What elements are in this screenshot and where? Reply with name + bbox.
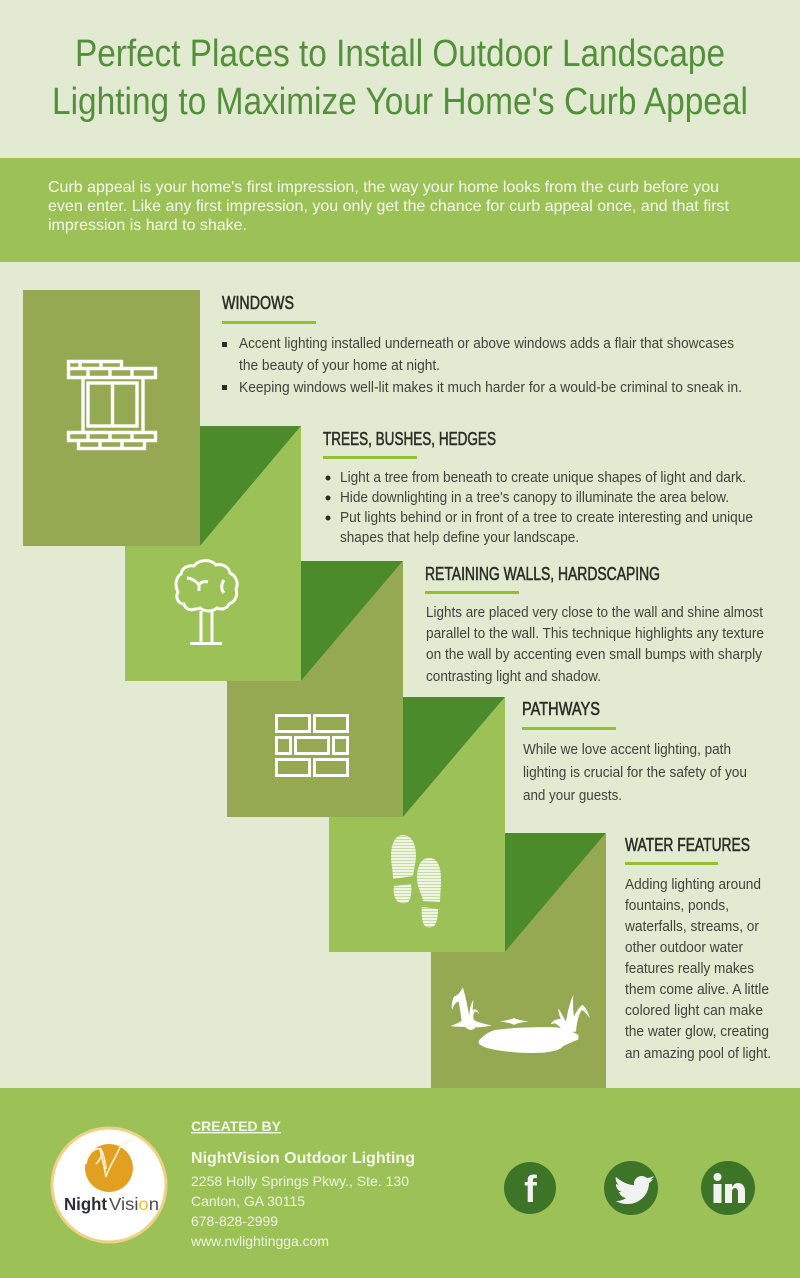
- panel: water block: [431, 833, 606, 1088]
- intro band: Curb appeal is your home's first impression, the way your home looks from the curb before you: [48, 179, 719, 196]
- contact details: Canton, GA 30115: [191, 1193, 305, 1209]
- section: water features: Adding lighting around: [625, 877, 761, 893]
- icon: pond with reeds: [451, 987, 590, 1053]
- icon: linkedin: [701, 1161, 755, 1215]
- contact details: www.nvlightingga.com: [190, 1233, 329, 1249]
- section: trees: Hide downlighting in a tree's canopy to illuminate the area below.: [340, 490, 729, 506]
- section: retaining walls: parallel to the wall. This technique highlights any texture: [426, 626, 764, 642]
- icon: twitter: [604, 1161, 658, 1215]
- heading: water features: WATER FEATURES: [625, 835, 750, 855]
- section: pathways: lighting is crucial for the safety of you: [523, 765, 747, 781]
- section: pathways: and your guests.: [523, 788, 622, 804]
- logo: NightVision: Vision: [109, 1194, 159, 1214]
- icon: facebook: f: [524, 1169, 537, 1211]
- section: pathways: [522, 699, 747, 804]
- heading: pathways: PATHWAYS: [522, 699, 600, 719]
- section: windows: Accent lighting installed underneath or above windows adds a flair that showcases: [239, 336, 734, 352]
- icon: tree: [176, 561, 237, 644]
- section: windows: the beauty of your home at night.: [239, 358, 440, 374]
- section: trees: Light a tree from beneath to create unique shapes of light and dark.: [340, 470, 746, 486]
- contact details: NightVision Outdoor Lighting: [191, 1150, 415, 1167]
- logo: NightVision: [52, 1128, 166, 1242]
- section: retaining walls: contrasting light and shadow.: [426, 669, 601, 685]
- section: retaining walls: Lights are placed very close to the wall and shine almost: [426, 605, 763, 621]
- section: water features: the water glow, creating: [625, 1024, 769, 1040]
- section: water features: other outdoor water: [625, 940, 743, 956]
- section: windows: [222, 293, 742, 396]
- panel: trees block: [125, 426, 301, 681]
- panel: pathways block: [329, 697, 505, 952]
- heading: windows: WINDOWS: [222, 293, 294, 313]
- contact details: 2258 Holly Springs Pkwy., Ste. 130: [191, 1173, 409, 1189]
- contact details: [190, 1118, 415, 1249]
- icon: brick wall: [276, 716, 348, 776]
- icon: facebook: [504, 1162, 556, 1214]
- logo: NightVision: Night: [64, 1194, 107, 1214]
- section: water features: waterfalls, streams, or: [624, 919, 759, 935]
- title: Perfect Places to Install Outdoor Landscape: [75, 33, 725, 75]
- section: water features: fountains, ponds,: [625, 898, 729, 914]
- section: trees: Put lights behind or in front of a tree to create interesting and unique: [340, 510, 753, 526]
- panel: windows block: [23, 290, 200, 546]
- footer: [0, 1088, 800, 1278]
- heading: retaining walls: RETAINING WALLS, HARDSCAPING: [425, 564, 660, 584]
- section: water features: an amazing pool of light.: [625, 1046, 771, 1062]
- intro band: impression is hard to shake.: [48, 217, 247, 234]
- section: retaining walls: [425, 564, 764, 685]
- contact details: CREATED BY: [191, 1118, 282, 1134]
- heading: trees: TREES, BUSHES, HEDGES: [323, 429, 496, 449]
- contact details: 678-828-2999: [191, 1213, 278, 1229]
- intro band: even enter. Like any first impression, you only get the chance for curb appeal once, and that first: [48, 198, 730, 215]
- section: windows: Keeping windows well-lit makes it much harder for a would-be criminal to sneak in.: [239, 380, 742, 396]
- icon: footprints: [391, 835, 441, 927]
- title: [52, 33, 748, 123]
- section: water features: colored light can make: [625, 1003, 763, 1019]
- icon: window with bricks: [68, 362, 156, 448]
- intro band: [0, 158, 800, 262]
- section: pathways: While we love accent lighting, path: [523, 742, 731, 758]
- panel: walls block: [227, 561, 403, 817]
- section: water features: features really makes: [625, 961, 754, 977]
- panel: staircase of icon blocks: [23, 290, 606, 1088]
- section: water features: them come alive. A little: [625, 982, 769, 998]
- section: trees: [323, 429, 753, 546]
- section: water features: [624, 835, 771, 1062]
- section: trees: shapes that help define your landscape.: [340, 530, 579, 546]
- section: retaining walls: on the wall by accenting even small bumps with sharply: [426, 647, 763, 663]
